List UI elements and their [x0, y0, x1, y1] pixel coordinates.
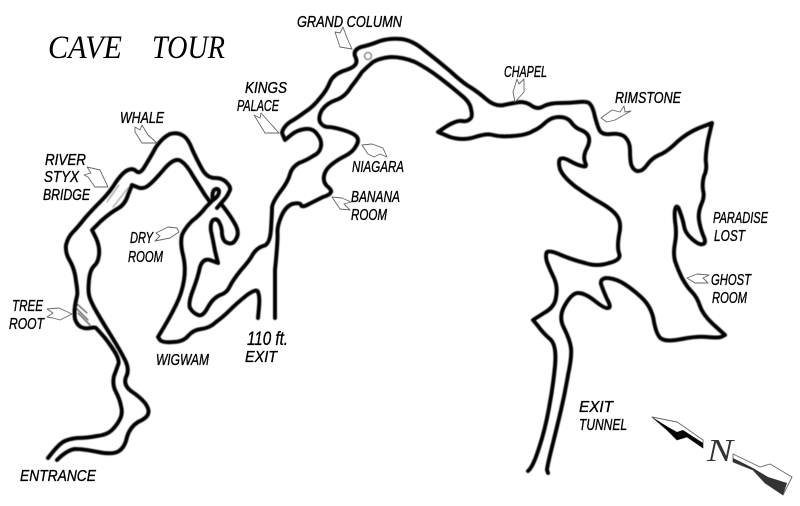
label: tree root: TREE [12, 298, 43, 315]
label: 110 ft exit: 110 ft. [247, 329, 288, 350]
label: grand column [297, 14, 402, 49]
tree root lines [75, 303, 90, 325]
label: niagara [352, 144, 404, 176]
cave map [48, 39, 725, 473]
label: chapel [504, 64, 547, 102]
spiral passage and wigwam outer wall [158, 189, 259, 342]
label: 110 ft exit [245, 329, 288, 366]
north arrow [652, 417, 792, 495]
label: dry room [128, 227, 179, 266]
label: exit tunnel: EXIT [579, 399, 614, 416]
label: ghost room: GHOST [711, 272, 752, 289]
arrow tail shading [733, 458, 787, 495]
title: CAVE [48, 30, 122, 66]
inner wall from 110 ft exit past niagara to exit tunnel [275, 57, 620, 471]
label: river styx bridge [43, 152, 108, 204]
label: river styx bridge: BRIDGE [43, 187, 90, 204]
main upper wall from wigwam branch through chapel, rimstone and ghost room to exit tunnel [189, 39, 725, 473]
label: ghost room: ROOM [712, 290, 747, 307]
label: kings palace: KINGS [245, 80, 287, 97]
label: 110 ft exit: EXIT [245, 349, 278, 366]
label: paradise lost [713, 210, 768, 245]
label: wigwam: WIGWAM [156, 352, 209, 369]
grand column marker [365, 53, 371, 59]
label: rimstone: RIMSTONE [615, 90, 681, 107]
label: ghost room [687, 272, 752, 307]
river styx bridge lines [107, 185, 128, 207]
label: tree root [9, 298, 72, 333]
label: grand column: GRAND COLUMN [297, 14, 402, 31]
title [48, 30, 225, 66]
arrow tail [733, 454, 792, 495]
label: paradise lost: LOST [714, 228, 746, 245]
label: kings palace [237, 80, 287, 133]
label: river styx bridge: STYX [44, 169, 80, 186]
label: chapel: CHAPEL [504, 64, 547, 81]
label: exit tunnel: TUNNEL [579, 417, 627, 434]
label: rimstone [601, 90, 681, 122]
label: tree root: ROOT [9, 316, 45, 333]
label: niagara: NIAGARA [352, 159, 404, 176]
label: dry room: ROOM [128, 249, 163, 266]
label: river styx bridge: RIVER [45, 152, 86, 169]
label: entrance: ENTRANCE [20, 468, 96, 485]
cave outline: entrance, right wall and dry room [57, 160, 210, 460]
label: whale [120, 110, 164, 143]
label: banana room [332, 189, 400, 224]
arrow head shading [652, 417, 703, 448]
label: banana room: BANANA [351, 189, 400, 206]
arrow head [652, 417, 703, 448]
label: dry room: DRY [130, 230, 154, 247]
letter N: N [706, 432, 735, 468]
label: paradise lost: PARADISE [713, 210, 768, 227]
label: banana room: ROOM [351, 207, 387, 224]
label: whale: WHALE [120, 110, 164, 127]
title: TOUR [152, 30, 225, 66]
label: exit tunnel [579, 399, 627, 434]
cave outline: entrance, left wall and whale passage [48, 133, 230, 458]
label: kings palace: PALACE [237, 98, 279, 115]
